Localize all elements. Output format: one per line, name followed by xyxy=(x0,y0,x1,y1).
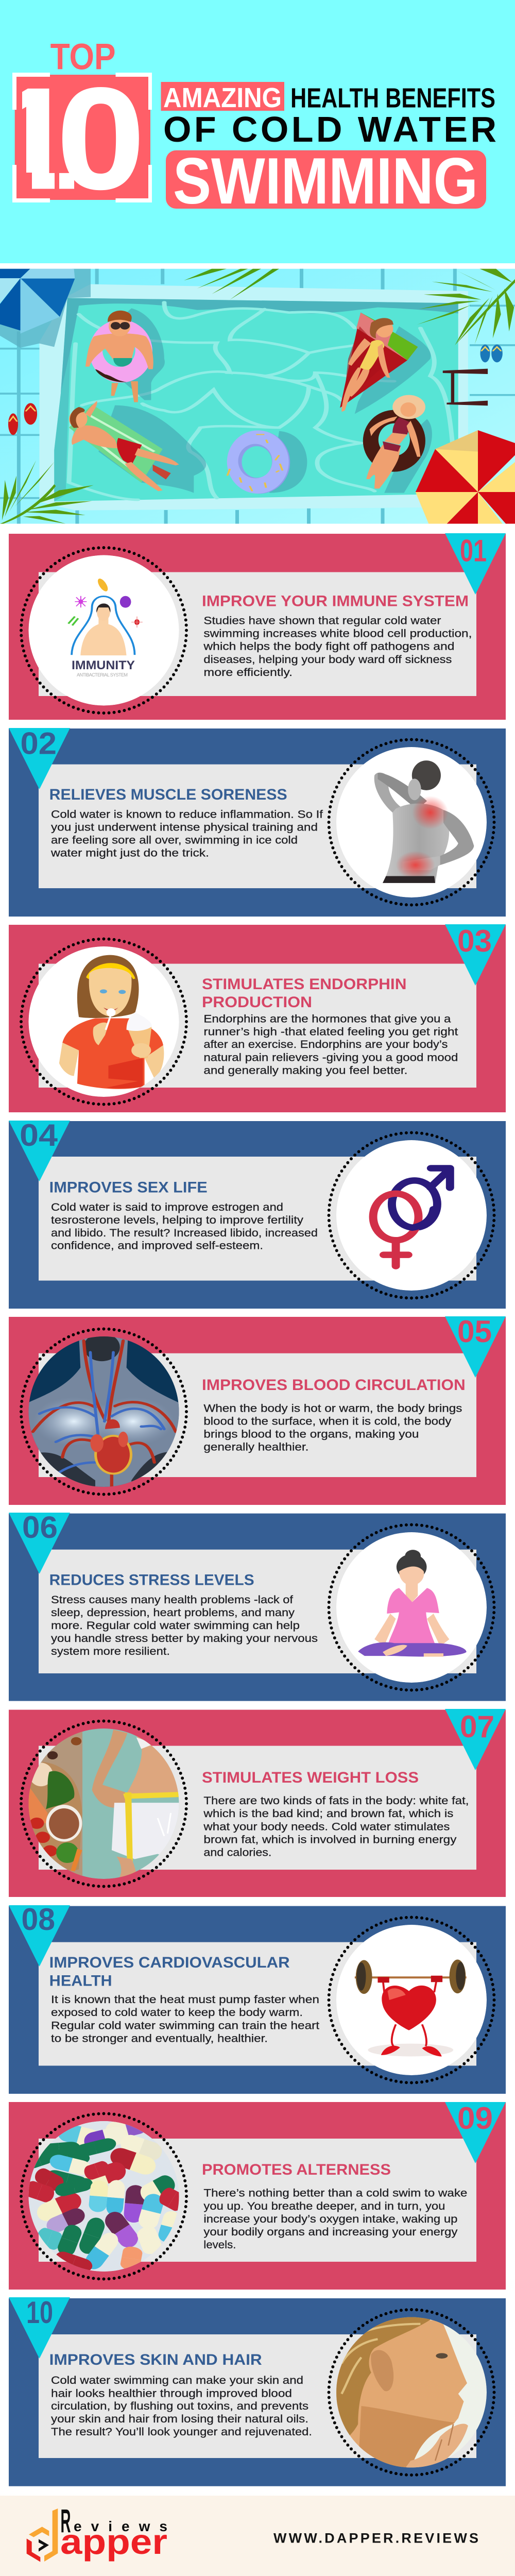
body text: and calories. xyxy=(203,1846,271,1859)
body text xyxy=(203,1013,458,1077)
number badge 10 xyxy=(9,2295,70,2359)
text card xyxy=(39,1550,476,1673)
body text: natural pain relievers -giving you a good mood xyxy=(203,1052,458,1064)
number badge 05 xyxy=(445,1314,506,1378)
text card xyxy=(39,1746,476,1870)
heading: STIMULATES ENDORPHIN xyxy=(202,976,407,993)
body text xyxy=(51,1993,319,2045)
number badge 02 xyxy=(9,726,70,789)
body text xyxy=(203,2187,467,2251)
text card xyxy=(39,765,476,888)
man on pink donut float xyxy=(85,311,153,402)
number badge 08: 08 xyxy=(22,1902,55,1937)
number badge 04 xyxy=(9,1118,70,1181)
heading: PRODUCTION xyxy=(202,994,312,1011)
panel 8: improves cardiovascular health xyxy=(9,1902,506,2094)
panel background xyxy=(9,925,506,1112)
title: top: TOP xyxy=(50,37,116,77)
panel 7: stimulates weight loss xyxy=(9,1709,506,1897)
body text: and libido. The result? Increased libido, increased xyxy=(51,1227,318,1239)
body text xyxy=(51,1594,318,1657)
heading: RELIEVES MUSCLE SORENESS xyxy=(49,786,287,803)
float shadows xyxy=(98,308,432,493)
text card xyxy=(39,1353,476,1477)
footer background xyxy=(0,2496,515,2576)
body text: confidence, and improved self-esteem. xyxy=(51,1240,263,1252)
number badge 02: 02 xyxy=(21,726,57,761)
picture: heart lifting barbell xyxy=(329,1918,494,2082)
red and yellow umbrella xyxy=(416,430,515,524)
body text: what your body needs. Cold water stimulates xyxy=(203,1820,450,1833)
heading: IMPROVES SKIN AND HAIR xyxy=(49,2351,262,2368)
body text: which helps the body fight off pathogens and xyxy=(203,640,454,653)
body text: increase your body’s oxygen intake, waking up xyxy=(203,2213,457,2225)
body text: Stress causes many health problems -lack of xyxy=(51,1594,293,1606)
title: amazing highlight: AMAZING xyxy=(163,82,282,113)
header background xyxy=(0,0,515,263)
body text: and generally making you feel better. xyxy=(203,1064,407,1077)
number badge 10: 10 xyxy=(26,2295,53,2330)
heading: IMPROVES CARDIOVASCULAR xyxy=(49,1954,290,1971)
body text: swimming increases white blood cell production, xyxy=(203,627,472,639)
body text: generally healthier. xyxy=(203,1441,308,1453)
panel background xyxy=(9,2298,506,2486)
text card xyxy=(39,2334,476,2458)
heading xyxy=(49,1954,290,1989)
panel 1: improve your immune system xyxy=(9,533,506,720)
logo: dapper reviews xyxy=(27,2503,167,2562)
tile grid xyxy=(0,269,515,524)
picture: colorful capsules xyxy=(21,2113,188,2279)
body text: your skin and hair from losing their natural oils. xyxy=(51,2413,308,2425)
text card xyxy=(39,1157,476,1281)
body text: blood to the surface, when it is cold, the body xyxy=(203,1415,452,1427)
logo: dapper reviews: eviews xyxy=(74,2518,167,2534)
body text: It is known that the heat must pump faster when xyxy=(51,1993,319,2006)
picture: immunity xyxy=(21,548,186,713)
panel 6: reduces stress levels xyxy=(9,1510,506,1701)
panel 10: improves skin and hair xyxy=(9,2295,506,2486)
number badge 05: 05 xyxy=(457,1314,492,1349)
number badge 03 xyxy=(445,924,506,986)
water caustics xyxy=(69,302,453,500)
picture: immunity: ANTIBACTERIAL SYSTEM xyxy=(77,672,128,677)
body text: Cold water swimming can make your skin and xyxy=(51,2374,303,2386)
picture: gender symbols xyxy=(329,1132,494,1298)
heading xyxy=(202,976,407,1011)
woman on chocolate donut float xyxy=(363,395,425,488)
panel 2: relieves muscle soreness xyxy=(9,726,506,917)
website url: WWW.DAPPER.REVIEWS xyxy=(273,2531,478,2546)
text card xyxy=(39,572,476,696)
hero illustration: pool from above xyxy=(0,269,515,524)
text card xyxy=(39,1942,476,2066)
number badge 08 xyxy=(9,1902,70,1967)
panel 4: improves sex life xyxy=(9,1118,506,1309)
picture: back pain man xyxy=(329,740,494,905)
body text xyxy=(51,2374,312,2438)
body text: you up. You breathe deeper, and in turn, you xyxy=(203,2200,445,2212)
flip flops xyxy=(8,345,503,435)
panel background xyxy=(9,2102,506,2290)
woman on watermelon float xyxy=(340,313,418,412)
panel background xyxy=(9,1121,506,1309)
body text: brings blood to the organs, making you xyxy=(203,1428,419,1440)
body text: more efficiently. xyxy=(203,666,293,679)
body text: you just underwent intense physical training and xyxy=(51,821,318,834)
palm leaves xyxy=(0,269,515,524)
body text: hair looks healthier through improved blood xyxy=(51,2387,292,2399)
logo icon xyxy=(27,2509,58,2562)
body text: tesrosterone levels, helping to improve fertility xyxy=(51,1214,303,1226)
heading: IMPROVES SEX LIFE xyxy=(49,1179,208,1196)
body text: There’s nothing better than a cold swim to wake xyxy=(203,2187,467,2199)
body text: sleep, depression, heart problems, and many xyxy=(51,1606,295,1619)
pool deck xyxy=(40,284,468,511)
picture: woman meditating xyxy=(329,1525,494,1690)
body text: you handle stress better by making your nervous xyxy=(51,1632,318,1645)
panel background xyxy=(9,534,506,720)
number badge 06 xyxy=(9,1510,70,1574)
ladder xyxy=(443,369,488,405)
body text: Regular cold water swimming can train the heart xyxy=(51,2019,319,2031)
body text: to be stronger and eventually, healthier. xyxy=(51,2032,268,2045)
logo: dapper reviews: apper xyxy=(60,2522,167,2562)
body text: levels. xyxy=(203,2239,236,2251)
picture: girl with ice cream xyxy=(21,939,186,1105)
body text: When the body is hot or warm, the body brings xyxy=(203,1402,462,1415)
body text: diseases, helping your body ward off sickness xyxy=(203,653,452,666)
logo: dapper reviews: R xyxy=(61,2503,71,2540)
heading: HEALTH xyxy=(49,1972,112,1989)
text card xyxy=(39,964,476,1088)
body text: brown fat, which is involved in burning energy xyxy=(203,1834,457,1846)
number badge 01 xyxy=(445,533,506,595)
body text xyxy=(203,614,472,679)
panel background xyxy=(9,728,506,917)
footer xyxy=(0,2496,515,2576)
panel 5: improves blood circulation xyxy=(9,1314,506,1505)
man on green float xyxy=(69,401,179,491)
body text: are feeling sore all over, swimming in ice cold xyxy=(51,834,298,846)
heading: PROMOTES ALTERNESS xyxy=(202,2161,391,2178)
number badge 03: 03 xyxy=(457,924,492,958)
water xyxy=(54,298,458,501)
panel 3: stimulates endorphin production xyxy=(9,924,506,1112)
title: swimming pill: SWIMMING xyxy=(173,144,478,217)
body text xyxy=(51,1201,318,1252)
number badge 09: 09 xyxy=(457,2101,493,2136)
body text: after an exercise. Endorphins are your body’s xyxy=(203,1038,448,1050)
body text: which is the bad kind; and brown fat, which is xyxy=(203,1807,453,1820)
heading: STIMULATES WEIGHT LOSS xyxy=(202,1769,419,1786)
body text: runner’s high -that elated feeling you get right xyxy=(203,1025,458,1038)
body text: exposed to cold water to keep the body warm. xyxy=(51,2006,303,2019)
number badge 07 xyxy=(445,1709,506,1770)
header panel xyxy=(0,0,515,263)
body text: Studies have shown that regular cold water xyxy=(203,614,441,626)
body text: Cold water is known to reduce inflammation. So If xyxy=(51,808,323,821)
lilac donut ring xyxy=(227,430,290,494)
body text: circulation, by flushing out toxins, and prevents xyxy=(51,2400,308,2412)
panel background xyxy=(9,1906,506,2094)
panel background xyxy=(9,1710,506,1897)
picture: circulatory system xyxy=(21,1329,186,1494)
panel background xyxy=(9,1514,506,1701)
body text xyxy=(50,808,323,859)
body text xyxy=(203,1402,462,1453)
number badge 04: 04 xyxy=(20,1118,58,1153)
body text xyxy=(203,1794,469,1859)
number badge 01: 01 xyxy=(460,534,487,568)
water shadow xyxy=(61,298,458,393)
number badge 09 xyxy=(445,2101,506,2163)
heading: REDUCES STRESS LEVELS xyxy=(49,1571,254,1588)
number badge 06: 06 xyxy=(22,1510,58,1545)
blue umbrella xyxy=(0,269,75,333)
title: of cold water: OF COLD WATER xyxy=(163,109,496,149)
number badge 07: 07 xyxy=(460,1709,494,1744)
text card xyxy=(39,2139,476,2262)
body text: your bodily organs and increasing your energy xyxy=(203,2226,458,2238)
body text: water might just do the trick. xyxy=(50,847,209,859)
picture: waist and healthy food xyxy=(20,1721,186,1887)
body text: more. Regular cold water swimming can help xyxy=(51,1619,300,1632)
panel background xyxy=(9,1317,506,1505)
body text: The result? You’ll look younger and rejuvenated. xyxy=(51,2426,312,2438)
body text: There are two kinds of fats in the body: white fat, xyxy=(203,1794,469,1807)
panel 9: promotes alterness xyxy=(9,2101,506,2290)
picture: woman's face profile xyxy=(329,2310,494,2475)
picture: immunity: IMMUNITY xyxy=(72,658,135,672)
body text: Cold water is said to improve estrogen and xyxy=(51,1201,283,1213)
body text: Endorphins are the hormones that give you a xyxy=(203,1013,451,1025)
heading: IMPROVES BLOOD CIRCULATION xyxy=(202,1377,466,1394)
body text: system more resilient. xyxy=(51,1645,170,1657)
heading: IMPROVE YOUR IMMUNE SYSTEM xyxy=(202,593,469,610)
